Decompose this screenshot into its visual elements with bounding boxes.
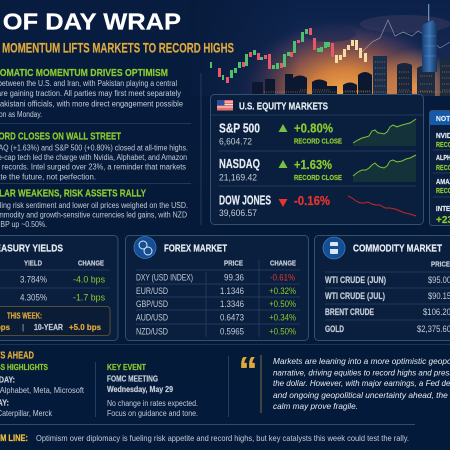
panel: key event [107,363,198,418]
forex table rows: -0.61% [270,272,295,282]
story: diplomatic momentum: are gaining traction. All parties may first meet separately [0,89,181,98]
panel: treasury yields: YIELD [24,258,42,268]
row: NASDAQ: 21,169.42 [219,172,257,184]
panel: key event: Wednesday, May 29 [107,385,173,394]
panel: key event: FOMC MEETING [107,374,158,384]
panel: forex market: PRICE [224,258,243,268]
commodity table rows: WTI CRUDE (JUL) [325,291,385,301]
panel: forex market [126,236,308,340]
candlestick chart [210,28,367,83]
forex table rows: EUR/USD [136,286,168,296]
panel: treasury yields: -1.7 bps [73,292,105,304]
panel: news stories [0,68,191,229]
forex table rows: DXY (USD INDEX) [136,272,193,282]
row: S&P 500: +0.80% [294,120,333,136]
forex table rows: +0.34% [269,312,296,322]
callout: this week: | [22,323,24,332]
panel: forex market: CHANGE [270,258,296,268]
commodity table rows: GOLD [325,324,344,334]
icon: US flag [217,100,233,110]
callout: this week [0,306,110,336]
forex table rows: +0.50% [269,326,296,336]
panel: U.S. equity markets: U.S. EQUITY MARKETS [239,102,328,112]
callout: this week: +5.0 bps [69,322,101,332]
One World Trade tower [422,4,437,72]
bottom line callout: Optimism over diplomacy is fueling risk appetite and record highs, but key catalysts this week could test the rally. [36,433,409,443]
row: S&P 500: 6,604.72 [219,136,252,148]
row: NASDAQ [219,155,416,184]
panel: market quote [238,350,450,413]
row: Dow Jones: DOW JONES [219,192,271,208]
panel: catalysts ahead [0,350,85,418]
panel: U.S. equity markets [210,94,424,224]
panel: key event: Focus on guidance and tone. [107,409,198,418]
forex table rows: GBP/USD [136,299,168,309]
commodity table rows [325,275,450,334]
skyline hero image [190,0,450,96]
forex table rows: +0.32% [269,286,296,296]
forex table rows [136,272,296,336]
panel: key event: No change in rates expected. [107,399,198,408]
city buildings [252,56,450,96]
panel: treasury yields: 3.784% [20,274,47,286]
forex table rows: AUD/USD [136,312,168,322]
commodity table rows: BRENT CRUDE [325,307,374,317]
story: record closes [0,132,188,182]
panel: key event: KEY EVENT [107,363,146,372]
row: S&P 500: RECORD CLOSE [294,136,342,146]
row: Dow Jones [219,192,416,219]
icon: quotation mark: “ [238,350,258,392]
row: S&P 500: S&P 500 [219,120,260,136]
row: S&P 500 [219,119,416,148]
forex table rows: +0.50% [269,299,296,309]
forex table rows: NZD/USD [136,326,168,336]
row: Dow Jones: 39,606.57 [219,208,257,219]
panel: treasury yields [0,236,118,340]
icon: oil barrel [323,237,345,259]
panel: treasury yields: 4.305% [20,292,47,304]
line chart overlay [362,20,450,52]
row: NASDAQ: +1.63% [294,157,332,172]
panel: commodity market [314,236,450,340]
callout: this week: 10-YEAR [34,322,63,332]
icon: currency coins [134,236,156,258]
forex table rows: 1.3346 [220,299,244,309]
forex table rows: 99.36 [224,272,244,282]
panel: treasury yields: -4.0 bps [73,274,105,286]
panel: forex market: FOREX MARKET [164,242,227,254]
panel: market quote: calm may prove fragile. [273,401,358,411]
story: dollar weakens [0,188,188,229]
commodity table rows: WTI CRUDE (JUN) [325,275,386,285]
row: NASDAQ: NASDAQ [219,156,260,171]
panel: treasury yields: CHANGE [78,258,104,268]
story: diplomatic momentum: Pakistani officials, with more direct engagement possible [0,100,184,108]
story: diplomatic momentum: between the U.S. and Iran, with Pakistan playing a central [0,79,177,88]
row: NASDAQ: RECORD CLOSE [294,173,342,182]
forex table rows: 0.5965 [220,326,244,336]
callout: this week: THIS WEEK: [7,312,42,320]
panel: notable stocks [430,110,450,226]
row: Dow Jones: -0.16% [294,193,330,208]
forex table rows: 1.1346 [220,286,244,296]
story: diplomatic momentum [0,68,184,119]
forex table rows: 0.6473 [220,312,244,322]
